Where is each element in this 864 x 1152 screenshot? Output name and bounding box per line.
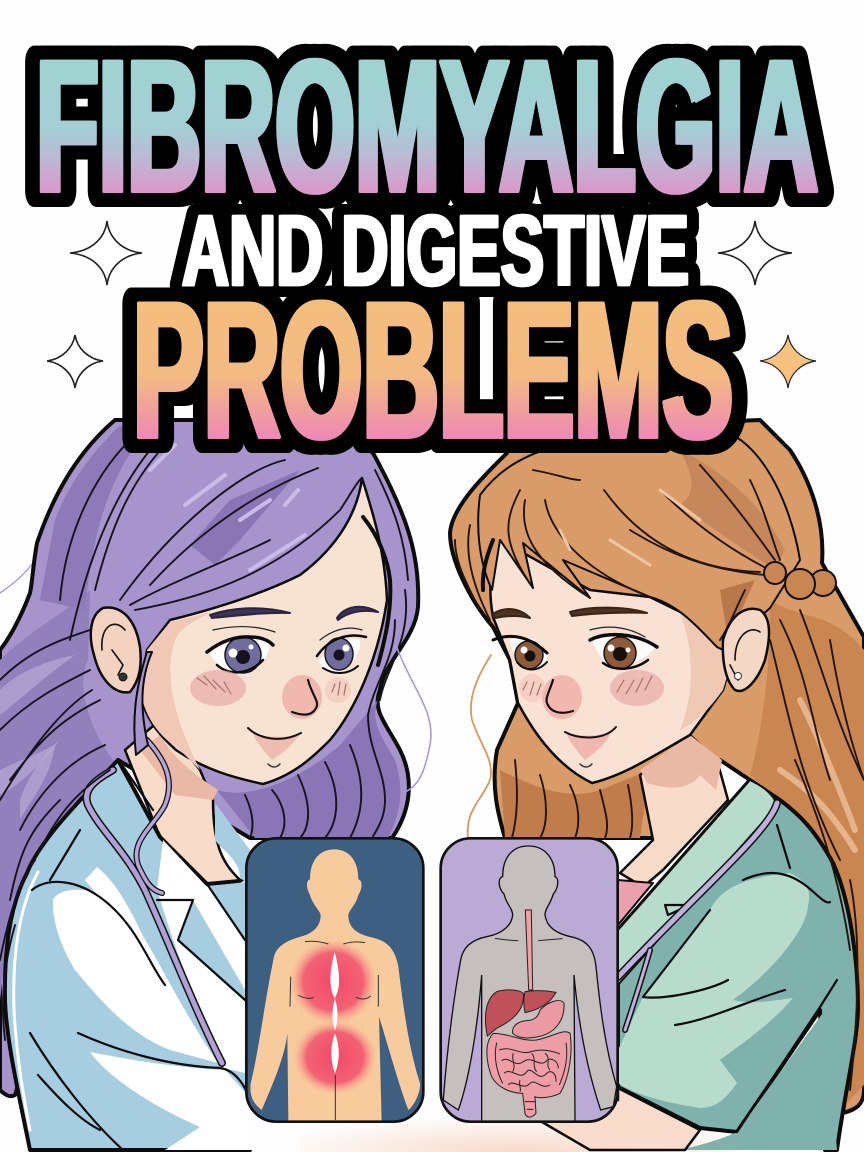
- left girl hair highlights: [150, 445, 305, 570]
- right girl fringe: [478, 430, 800, 650]
- left girl right eyebrow: [337, 607, 378, 620]
- left girl coat: [5, 760, 250, 1150]
- right girl stethoscope: [618, 803, 777, 977]
- left girl side strand: [134, 652, 152, 755]
- left girl coat fold lines: [30, 762, 250, 1150]
- right girl hair highlights: [560, 490, 700, 565]
- right girl hair shading top: [680, 450, 785, 570]
- liver: [485, 990, 556, 1036]
- sparkle: upper left: [70, 221, 142, 285]
- sparkle: upper right: [718, 221, 792, 285]
- right girl: [450, 420, 864, 1150]
- panel: digestive organs body: [441, 838, 618, 1122]
- esophagus: [525, 910, 533, 990]
- left girl stethoscope: [87, 770, 222, 1063]
- right girl hair: [450, 420, 864, 1113]
- sparkle: lower right: [760, 335, 816, 388]
- left girl left eyebrow: [210, 608, 290, 618]
- stomach: [513, 1001, 564, 1038]
- right girl face: [490, 540, 735, 783]
- left girl hair shading: [0, 590, 118, 1000]
- right girl mouth: [565, 727, 616, 767]
- right girl braid bun: [764, 562, 836, 599]
- spine: [330, 952, 339, 1073]
- right girl ear: [723, 609, 769, 691]
- left girl strand over neck: [136, 740, 169, 893]
- right girl right eye: [590, 627, 657, 669]
- sparkle: lower left: [47, 335, 103, 388]
- right girl right eyebrow: [570, 608, 647, 616]
- right girl scrubs: [618, 780, 858, 1150]
- left girl right eye: [317, 628, 366, 673]
- right girl hair strands: [455, 465, 864, 1090]
- pain glow: [289, 939, 377, 1095]
- left girl nose: [292, 680, 317, 715]
- left girl white shirt: [157, 840, 245, 1073]
- left girl mouth: [248, 728, 301, 767]
- left girl hairline strand: [363, 517, 390, 665]
- right girl scrubs lines: [618, 825, 837, 1132]
- loose purple strand, upper left: [0, 563, 33, 593]
- left girl left eye: [207, 626, 275, 673]
- panel: widespread pain body: [246, 838, 423, 1122]
- right girl loose orange strand: [468, 655, 491, 838]
- right girl hair shading: [750, 600, 864, 1105]
- left girl hair: [0, 420, 418, 1096]
- left girl coat highlights: [53, 867, 252, 1150]
- left girl neck: [125, 720, 240, 886]
- left girl: [0, 420, 431, 1150]
- left girl ear: [91, 607, 141, 692]
- right girl left eye: [493, 636, 548, 670]
- right girl neck: [620, 735, 728, 887]
- left girl face: [140, 478, 387, 784]
- left girl hair strands: [0, 440, 408, 1040]
- right girl left eyebrow: [493, 609, 530, 618]
- left girl blush: [190, 670, 351, 719]
- right girl hand: [542, 1088, 700, 1150]
- body silhouette: [443, 846, 617, 1122]
- right girl nose: [547, 680, 573, 713]
- right girl pink top: [618, 880, 653, 925]
- intestines: [487, 1032, 571, 1117]
- right girl blush: [519, 670, 664, 719]
- right girl collar: [618, 780, 778, 985]
- body silhouette: [250, 849, 420, 1122]
- right girl sleeve highlight: [618, 873, 809, 1108]
- left girl loose purple strand: [396, 645, 431, 792]
